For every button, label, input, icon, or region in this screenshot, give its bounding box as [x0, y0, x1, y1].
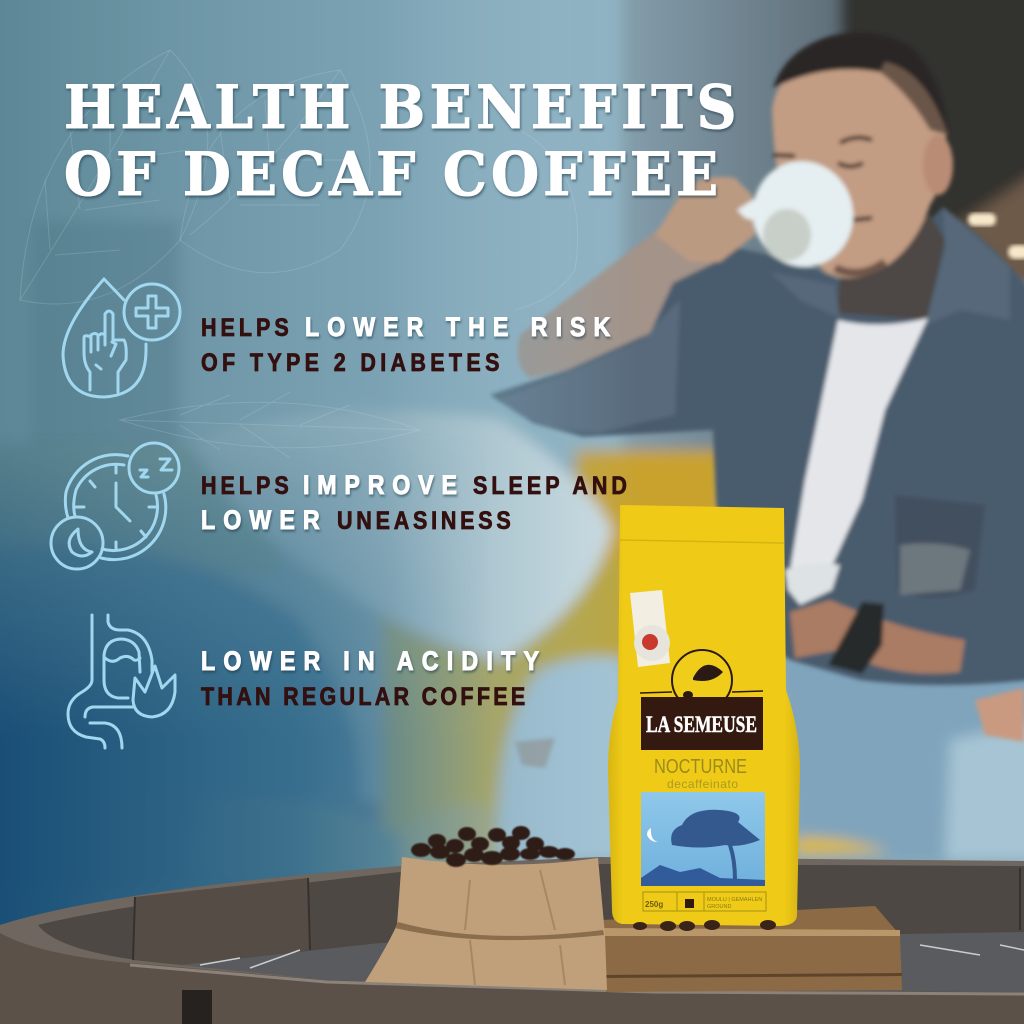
- quality sticker: [630, 590, 670, 667]
- title: HEALTH BENEFITS: [64, 72, 737, 143]
- title: [64, 72, 737, 210]
- product name: [654, 756, 747, 791]
- bag info boxes: GROUND: [707, 904, 731, 910]
- fur throw: [190, 411, 612, 660]
- icon: clock with moon and zzz: [51, 443, 179, 569]
- brand band: LA SEMEUSE: [646, 712, 757, 737]
- benefit 3 text: [201, 646, 539, 710]
- benefit 2 text: SLEEP AND: [473, 471, 627, 499]
- face: [772, 67, 947, 278]
- benefit 2 text: IMPROVE: [303, 470, 457, 500]
- collar: [770, 207, 1010, 325]
- product name: decaffeinato: [667, 777, 738, 791]
- pocket: [895, 495, 985, 598]
- facial features: [773, 138, 872, 220]
- shirt body: [490, 207, 1024, 685]
- bag info boxes: 250g: [645, 900, 663, 909]
- benefit 2 text: HELPS: [201, 471, 289, 499]
- brand band: [641, 697, 763, 750]
- hand with saucer: [785, 563, 840, 605]
- tray surface: [180, 932, 1024, 992]
- sofa: [575, 450, 725, 650]
- logo roundel: [640, 650, 763, 710]
- benefit 1 text: OF TYPE 2 DIABETES: [201, 348, 499, 376]
- table rim and surface: [0, 857, 1024, 1024]
- neck shadow: [837, 215, 945, 320]
- wooden crate: [602, 906, 902, 992]
- title: OF DECAF COFFEE: [64, 139, 718, 210]
- jeans: [498, 657, 625, 860]
- bag info boxes: MOULU | GEMAHLEN: [707, 897, 762, 903]
- cup: [737, 150, 865, 278]
- paper bag of coffee beans: [365, 826, 607, 990]
- product name: NOCTURNE: [654, 756, 747, 778]
- night scene illustration: [641, 792, 765, 886]
- icon: stomach with flame: [68, 615, 175, 748]
- bag info boxes: [643, 892, 766, 911]
- ear: [923, 135, 953, 195]
- benefit 2 text: UNEASINESS: [337, 506, 511, 534]
- icon: blood drop with finger and plus: [63, 279, 180, 397]
- benefit 1 text: HELPS: [201, 313, 289, 341]
- hair: [773, 33, 948, 135]
- benefit 3 text: LOWER IN ACIDITY: [201, 646, 539, 676]
- benefit 2 text: LOWER: [201, 505, 320, 535]
- benefit 1 text: LOWER THE RISK: [305, 312, 610, 342]
- benefit 1 text: [201, 312, 610, 376]
- t-shirt: [790, 318, 928, 570]
- forearm: [518, 200, 720, 378]
- benefit 2 text: [201, 470, 627, 535]
- benefit 3 text: THAN REGULAR COFFEE: [201, 682, 525, 710]
- blue cushion: [0, 543, 361, 810]
- coffee bag La Semeuse Nocturne: [608, 505, 800, 931]
- left colour overlay: [0, 0, 620, 925]
- front rim: [0, 933, 1024, 1024]
- loose beans: [633, 920, 776, 931]
- beans: [411, 826, 575, 867]
- man drinking coffee: [490, 33, 1024, 685]
- decorative leaf outlines: [20, 50, 578, 458]
